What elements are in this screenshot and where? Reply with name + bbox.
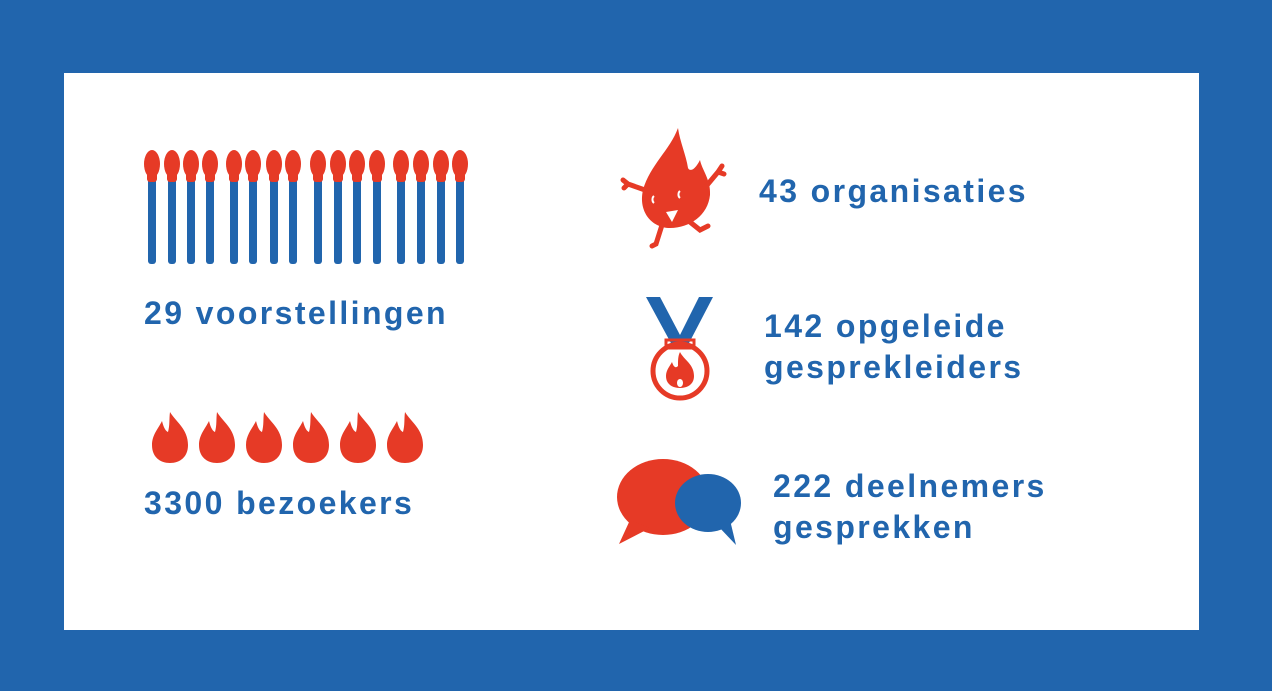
text: 142 opgeleide gesprekleiders: 142 opgeleide [764, 308, 1007, 344]
text: 142 opgeleide gesprekleiders: gesprekleiders [764, 349, 1024, 385]
white panel [64, 73, 1199, 630]
text: 222 deelnemers gesprekken: gesprekken [773, 509, 975, 545]
icon: matches row [144, 150, 468, 264]
icon: flame mascot [623, 128, 724, 246]
text: 43 organisaties: 43 organisaties [759, 173, 1028, 209]
text: 222 deelnemers gesprekken [773, 468, 1047, 545]
icon: speech bubbles [617, 459, 741, 545]
text: 3300 bezoekers: 3300 bezoekers [144, 485, 414, 521]
text: 142 opgeleide gesprekleiders [764, 308, 1024, 385]
text: 29 voorstellingen: 29 voorstellingen [144, 295, 448, 331]
icon: medal [646, 297, 713, 398]
text: 222 deelnemers gesprekken: 222 deelnemers [773, 468, 1047, 504]
icon: flames row [152, 412, 423, 463]
